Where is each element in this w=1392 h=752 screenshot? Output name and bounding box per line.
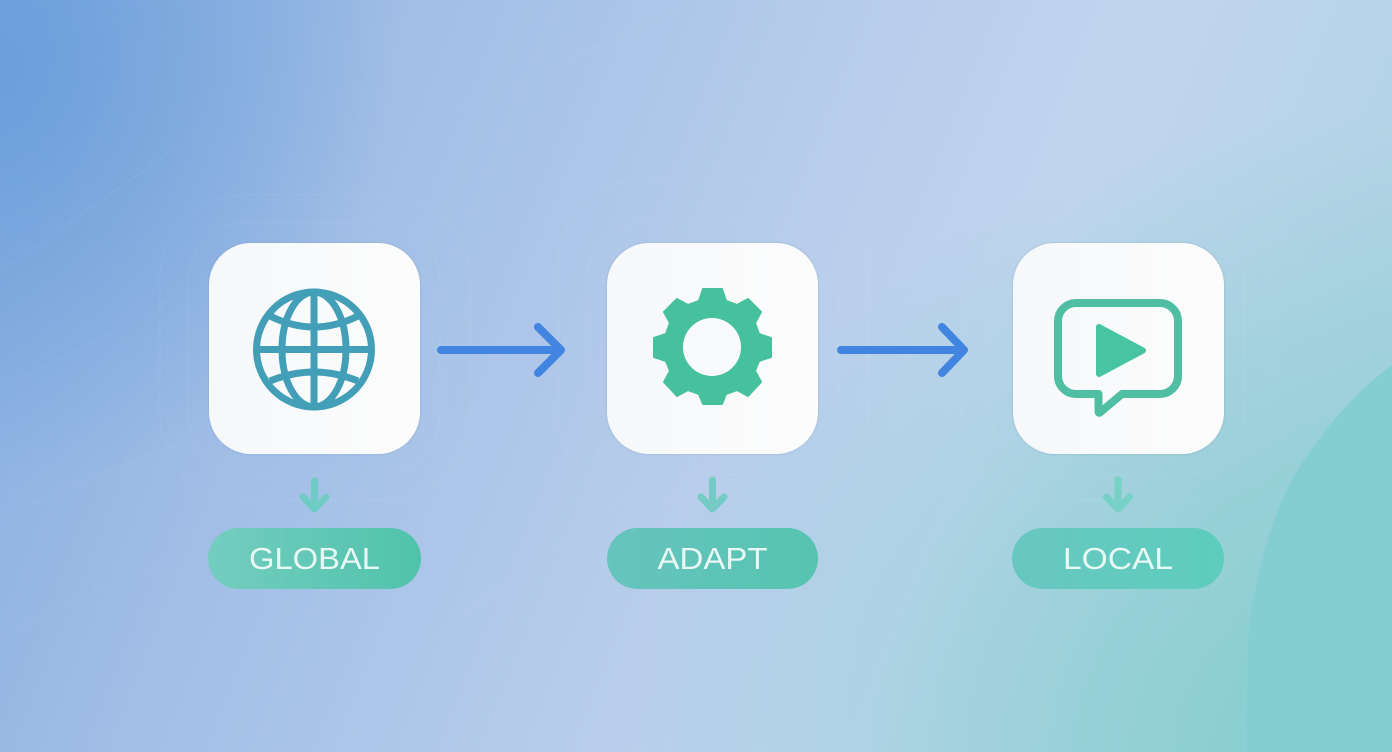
card: global — [209, 243, 420, 454]
label: global: GLOBAL — [249, 541, 380, 576]
arrow: down to global label — [303, 481, 326, 509]
arrow: adapt to local — [841, 327, 964, 373]
card: local — [1013, 243, 1224, 454]
arrow: down to local label — [1106, 480, 1130, 509]
label: adapt: ADAPT — [658, 541, 768, 576]
arrow: down to adapt label — [701, 480, 724, 509]
icon: globe — [256, 292, 372, 407]
label: adapt — [607, 528, 818, 589]
card: adapt — [607, 243, 818, 454]
step: global — [208, 243, 421, 589]
label: local: LOCAL — [1063, 541, 1173, 576]
label: global — [208, 528, 421, 589]
step: adapt — [607, 243, 818, 589]
step: local — [1012, 243, 1224, 589]
label: local — [1012, 528, 1224, 589]
icon: video speech bubble — [1058, 303, 1178, 413]
decorative corner shape — [1247, 365, 1392, 752]
arrow: global to adapt — [441, 327, 561, 373]
icon: gear — [654, 289, 771, 404]
